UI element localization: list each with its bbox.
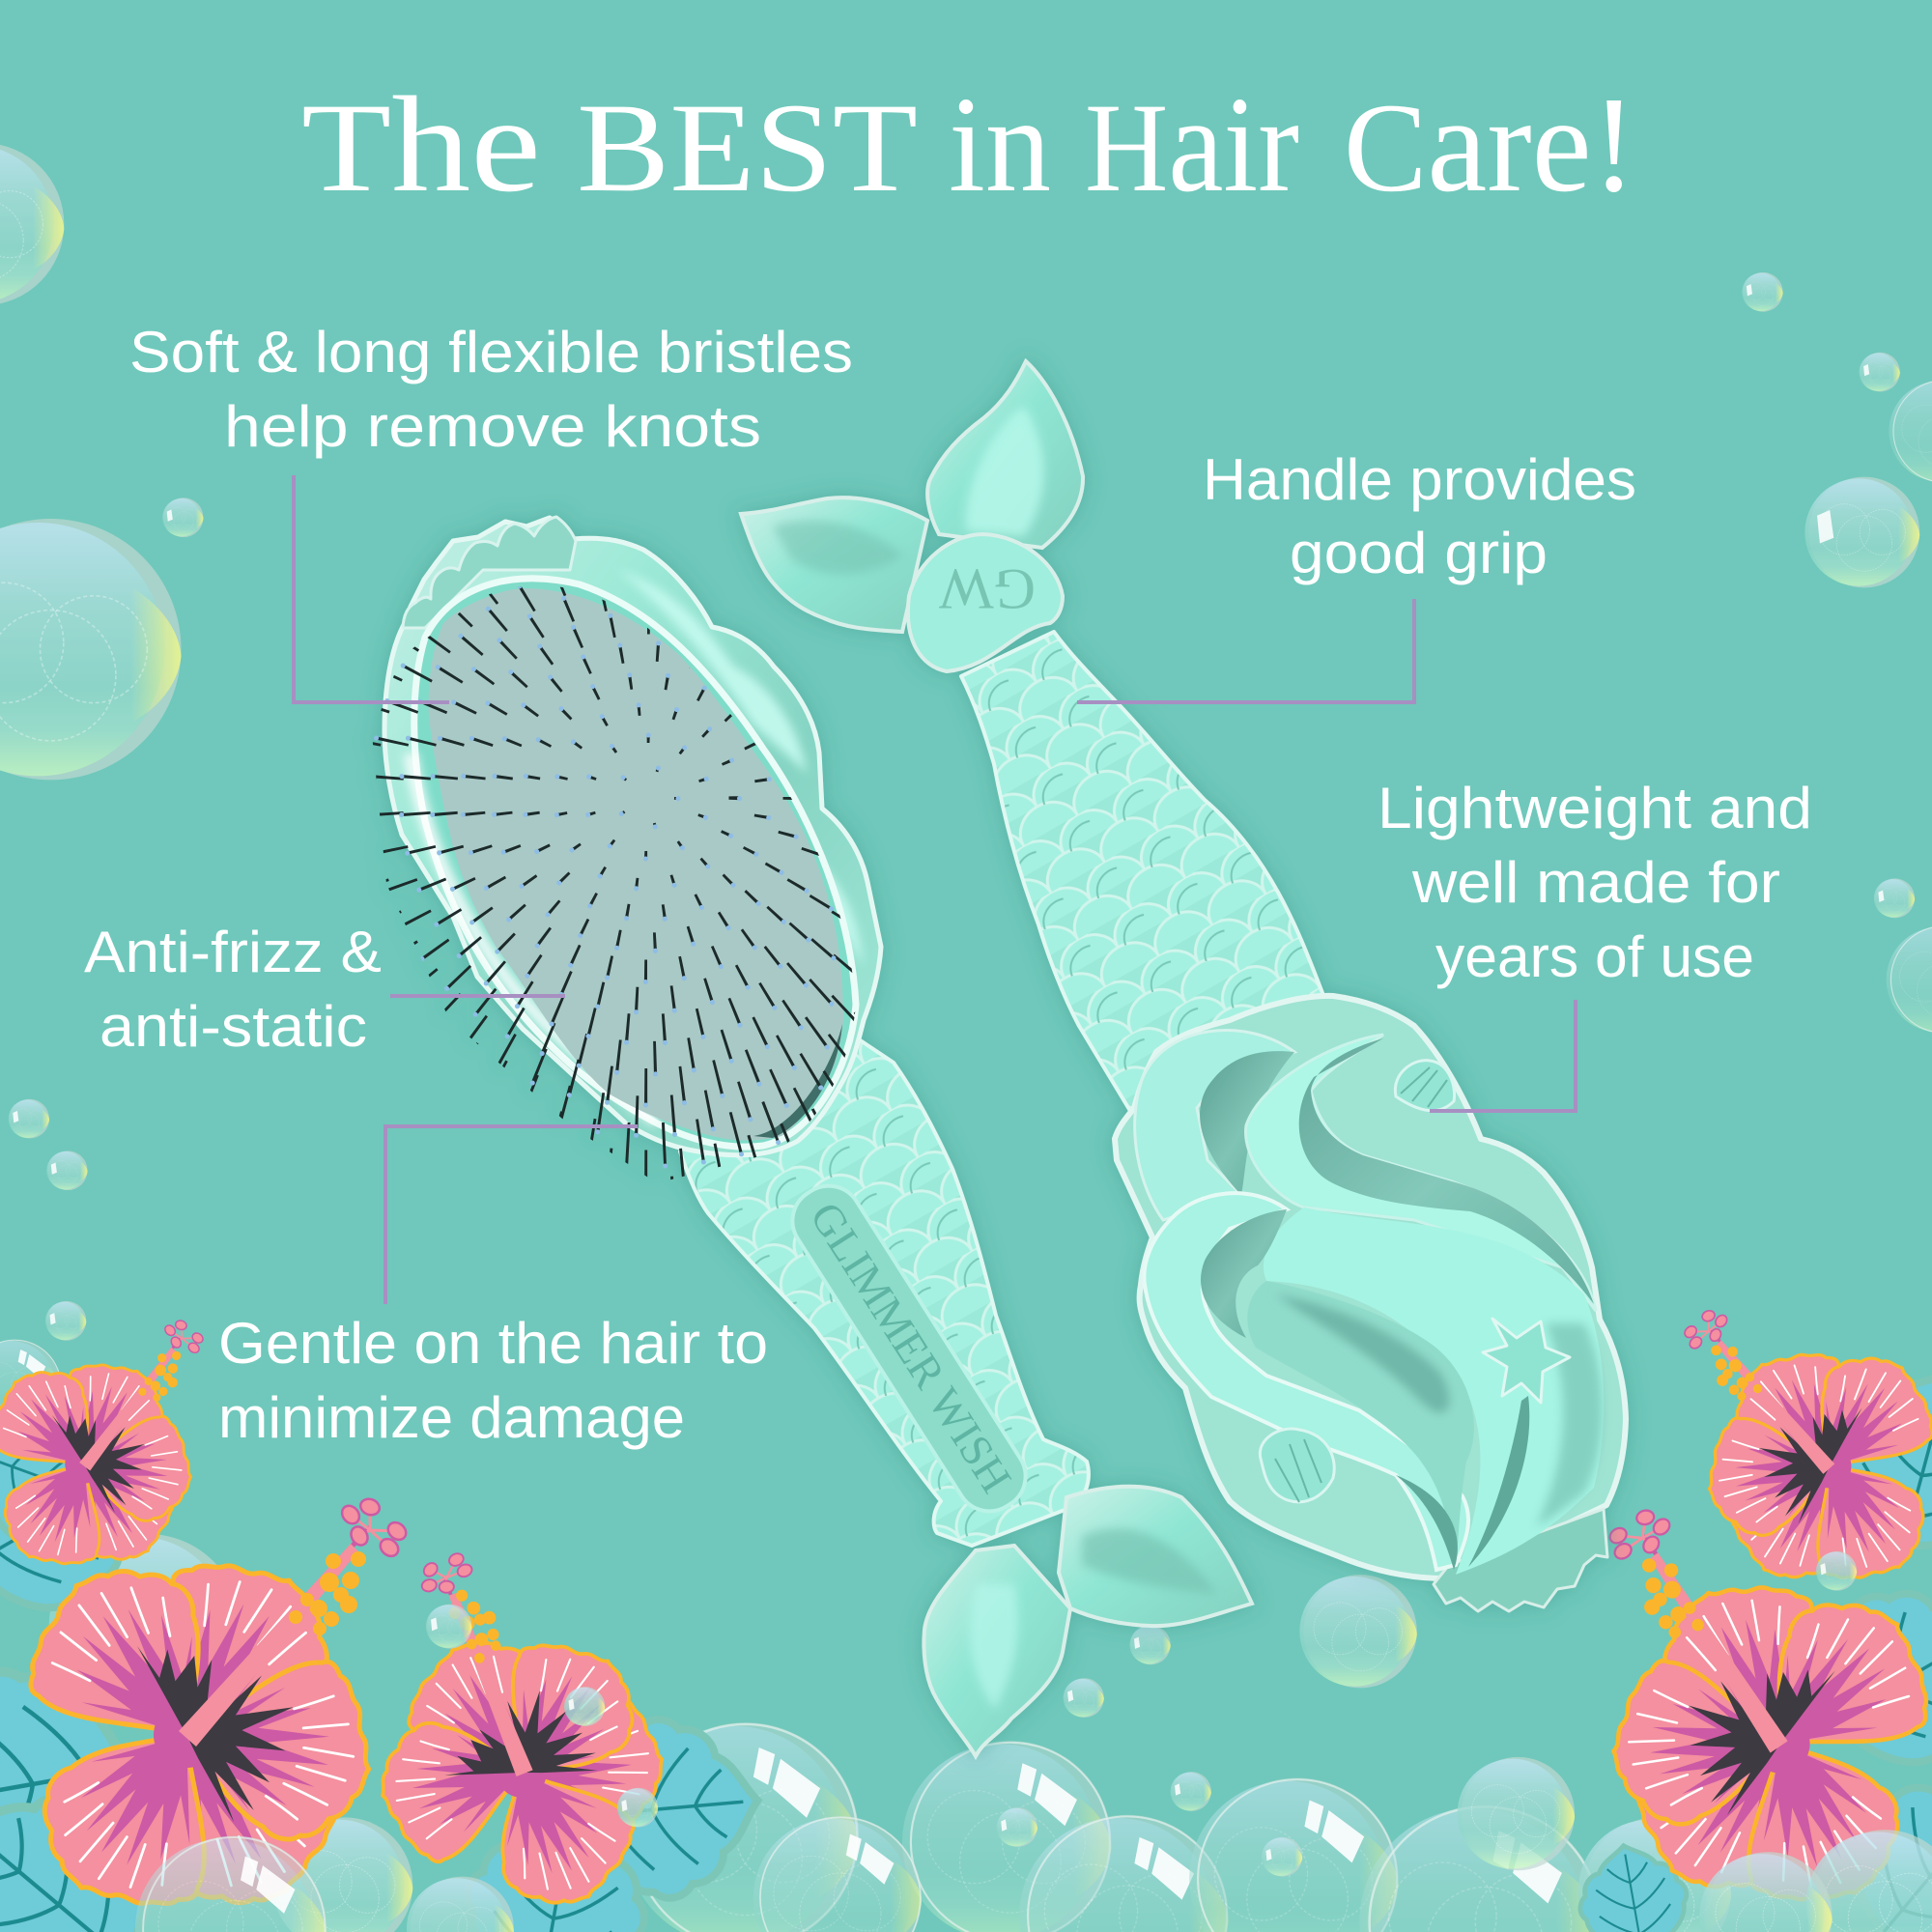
seashell upper [1395,1061,1455,1111]
leaves right [1571,1350,1932,1932]
callout: lightweight [1430,1000,1576,1111]
tail knot with logo [908,534,1063,671]
bubble cluster: bottom row [49,1534,1731,1932]
bubble cluster: right edge [1742,272,1932,1034]
hair head outline [1115,996,1626,1578]
label: bristles [129,320,853,459]
tail fin left [741,497,927,632]
hair flowing centre [1247,1281,1474,1565]
label: bristles: Soft & long flexible bristles [129,320,853,384]
scalloped shell crown [403,517,576,628]
label: gentle: Gentle on the hair to [218,1311,768,1376]
bristle pad [429,588,843,1140]
pad shading [753,1024,842,1138]
hair dark streak [1396,1396,1529,1570]
hibiscus large left [0,1496,410,1932]
callout: gentle [385,1126,638,1304]
callout: handle [1077,599,1414,702]
brush head shell [384,518,881,1155]
starfish [1483,1319,1570,1403]
title: in [949,68,1051,220]
hair lock B [1246,1035,1596,1311]
title: Care! [1344,68,1636,220]
handle with scales [961,632,1333,1111]
leaves left [0,1391,765,1932]
hair band middle [1264,1208,1604,1575]
callout: anti-frizz [390,994,565,998]
hibiscus lower right [1555,1503,1932,1932]
name plate: GLIMMER WISH [801,1193,1021,1501]
label: lightweight: Lightweight and [1378,776,1812,840]
label: lightweight: well made for [1411,850,1780,915]
hair lock upper left [1135,1031,1294,1220]
label: lightweight: years of use [1435,924,1754,989]
callout: bristles [294,475,449,702]
hibiscus top right [1683,1309,1932,1604]
title [301,68,1636,220]
title: The [301,68,541,220]
bristles [373,586,856,1180]
label: anti-frizz: Anti-frizz & [84,920,382,984]
hibiscus medium [295,1540,739,1932]
title: BEST [577,76,918,218]
hibiscus top left [0,1318,221,1592]
title: Hair [1085,68,1299,220]
hair dark shade upper [1200,1051,1294,1195]
seashell lower [1260,1429,1334,1502]
shell bright lobes [618,570,863,966]
brush right: back side [741,361,1626,1611]
label: bristles: help remove knots [224,394,761,459]
label: lightweight [1378,776,1812,989]
label: gentle [218,1311,768,1450]
label: handle: good grip [1290,521,1548,585]
tail knot with logo: GW [939,557,1036,621]
hair right shade [1536,1323,1603,1526]
hair dark shade lower [1201,1209,1287,1338]
label: anti-frizz [84,920,382,1059]
tail fin right [1059,1487,1252,1626]
label: anti-frizz: anti-static [99,994,367,1059]
handle with scales [680,1014,1089,1546]
white rim highlight lower left [411,753,657,1121]
hair dark band upper [1299,1038,1594,1304]
hair lock lower [1144,1193,1468,1570]
brush left: bristle side [373,513,1255,1760]
hair dark flow [1275,1294,1449,1412]
bubble cluster: left and top edge [0,143,203,1433]
label: gentle: minimize damage [218,1385,685,1450]
label: handle [1203,447,1636,585]
foreground bubbles [135,1551,1932,1932]
tail fin lower [923,1546,1070,1756]
tail fin top [927,361,1083,548]
head inner rim [414,579,856,1147]
label: handle: Handle provides [1203,447,1636,512]
callout lines [294,475,1576,1304]
scalloped shell edge [1434,1509,1607,1611]
